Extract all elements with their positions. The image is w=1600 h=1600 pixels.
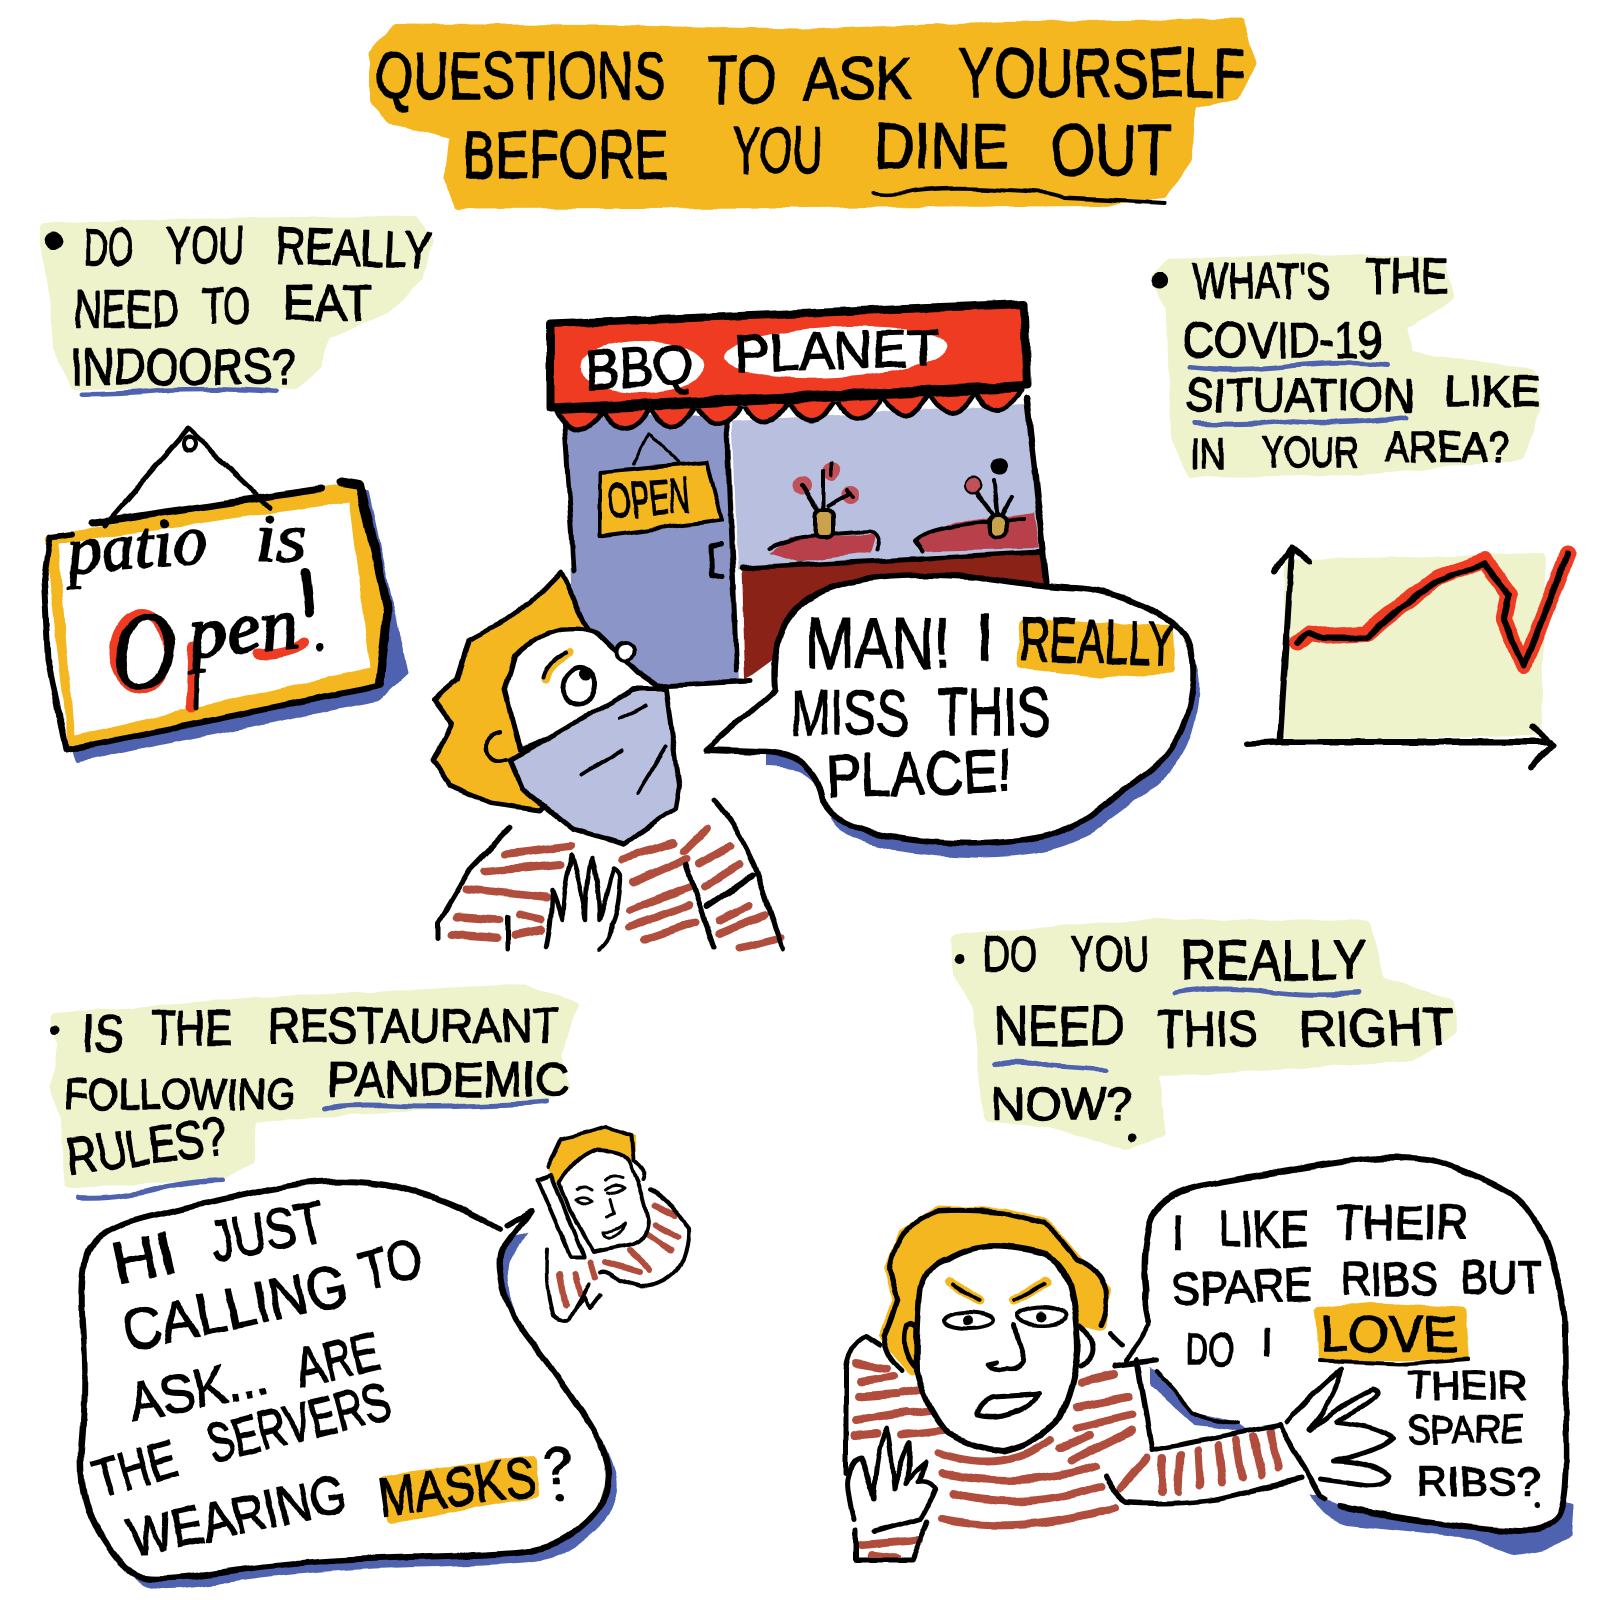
- speech bubble: man i really miss this place: MAN!: [806, 604, 950, 684]
- panel: do you really need to eat indoors: TO: [202, 278, 250, 336]
- icon: patio is open sign: [44, 429, 406, 760]
- speech bubble: calling about masks: ARE: [290, 1321, 386, 1399]
- ears: [905, 1324, 1093, 1368]
- panel: do you really need this right now: [954, 924, 1453, 1145]
- speech bubble: i like their spare ribs: RIBS?: [1417, 1458, 1540, 1505]
- speech bubble: calling about masks: HI: [106, 1219, 182, 1298]
- panel: do you really need to eat indoors: [44, 217, 433, 395]
- awning: [550, 304, 1027, 408]
- panel: do you really need this right now: REALLY: [1180, 928, 1366, 991]
- panel: do you really need to eat indoors: REALLY: [275, 217, 433, 280]
- panel: do you really need to eat indoors: EAT: [283, 275, 372, 331]
- title: DINE: [874, 110, 1009, 182]
- speech bubble: calling about masks: ASK...: [123, 1346, 272, 1434]
- speech bubble: i like their spare ribs: SPARE: [1407, 1408, 1524, 1452]
- speech bubble: calling about masks: [81, 1181, 616, 1589]
- face: [559, 1149, 648, 1252]
- shop name: PLANET: [733, 319, 940, 384]
- speech bubble: i like their spare ribs: RIBS: [1341, 1253, 1438, 1305]
- title: [374, 24, 1252, 204]
- hair: [884, 1211, 1106, 1370]
- panel: do you really need this right now: RIGHT: [1299, 998, 1453, 1059]
- pointing arm: [1106, 1325, 1302, 1503]
- striped body: [547, 1190, 689, 1320]
- title: OUT: [1050, 111, 1172, 191]
- panel: do you really need to eat indoors: NEED: [74, 281, 179, 339]
- speech bubble: calling about masks: SERVERS: [200, 1371, 395, 1475]
- line chart: rising covid curve: [1246, 548, 1568, 768]
- speech bubble: man i really miss this place: REALLY: [1019, 605, 1177, 679]
- title: ASK: [803, 45, 912, 112]
- speech bubble: i like their spare ribs: LOVE: [1320, 1306, 1458, 1362]
- left table with flowers: [770, 463, 878, 562]
- eyes, brows, nose and mouth: [944, 1282, 1066, 1417]
- speech bubble: i like their spare ribs: BUT: [1461, 1251, 1542, 1303]
- panel: what's the covid-19 situation like in your area: [1152, 248, 1540, 479]
- illustration: angry person with striped top: [846, 1210, 1392, 1560]
- panel: what's the covid-19 situation like in your area: WHAT'S: [1193, 253, 1331, 309]
- panel: is the restaurant following pandemic rules: FOLLOWING: [64, 1070, 296, 1119]
- panel: do you really need to eat indoors: DO: [84, 219, 133, 277]
- panel: is the restaurant following pandemic rules: IS: [82, 1005, 125, 1063]
- panel: is the restaurant following pandemic rules: RULES?: [63, 1107, 230, 1187]
- facial features: [576, 1177, 625, 1238]
- speech bubble: calling about masks: TO: [353, 1228, 429, 1302]
- panel: is the restaurant following pandemic rules: THE: [151, 1000, 232, 1058]
- speech bubble: i like their spare ribs: SPARE: [1171, 1258, 1313, 1315]
- restaurant door: [566, 415, 740, 686]
- open sign on door: [600, 434, 722, 536]
- speech bubble: calling about masks: MASKS: [374, 1445, 539, 1529]
- speech bubble: i like their spare ribs: THEIR: [1407, 1364, 1527, 1408]
- hair: [433, 571, 640, 810]
- panel: do you really need this right now: NOW?: [991, 1078, 1132, 1130]
- face: [917, 1246, 1078, 1451]
- speech bubble: man i really miss this place: I: [976, 600, 994, 674]
- speech bubble: calling about masks: THE: [87, 1429, 184, 1510]
- panel: do you really need to eat indoors: YOU: [166, 217, 245, 275]
- panel: is the restaurant following pandemic rules: PANDEMIC: [327, 1054, 569, 1107]
- speech bubble: man i really miss this place: [706, 576, 1199, 858]
- title: YOURSELF: [958, 34, 1246, 112]
- icon: patio is open sign: O: [112, 590, 176, 712]
- restaurant window: [732, 405, 1042, 570]
- speech bubble: i like their spare ribs: I: [1172, 1207, 1185, 1259]
- panel: do you really need this right now: DO: [984, 926, 1037, 982]
- illustration: masked person looking up: [433, 571, 783, 950]
- door handle: [711, 544, 723, 577]
- icon: patio is open sign: patio: [60, 501, 210, 589]
- panel: what's the covid-19 situation like in your area: IN: [1190, 430, 1226, 479]
- panel: is the restaurant following pandemic rules: [51, 990, 573, 1198]
- speech bubble: i like their spare ribs: DO: [1185, 1323, 1234, 1375]
- striped top: [439, 800, 783, 950]
- shop name: BBQ: [583, 332, 695, 402]
- speech bubble: calling about masks: CALLING: [117, 1253, 354, 1364]
- title: QUESTIONS: [375, 38, 666, 114]
- pointing hand: [1280, 1369, 1392, 1499]
- eye and brow: [544, 643, 634, 709]
- hand: [546, 855, 620, 950]
- panel: what's the covid-19 situation like in your area: YOUR: [1262, 428, 1359, 477]
- speech bubble: man i really miss this place: PLACE!: [825, 737, 1013, 812]
- illustration: person on the phone: [538, 1127, 689, 1320]
- speech bubble: calling about masks: ?: [543, 1438, 572, 1496]
- mask: [510, 689, 679, 844]
- hair: [548, 1127, 635, 1183]
- panel: do you really need this right now: NEED: [994, 994, 1124, 1057]
- speech bubble: i like their spare ribs: LIKE: [1218, 1201, 1308, 1257]
- counter: [742, 552, 1050, 680]
- panel: what's the covid-19 situation like in your area: AREA?: [1384, 423, 1509, 472]
- awning scallops: [556, 390, 1022, 431]
- icon: patio is open sign: pen: [179, 583, 302, 674]
- speech bubble: man i really miss this place: THIS: [938, 674, 1050, 750]
- phone: [538, 1175, 584, 1257]
- panel: what's the covid-19 situation like in your area: SITUATION: [1185, 369, 1415, 421]
- title: BEFORE: [462, 117, 668, 193]
- right table with flowers: [915, 458, 1040, 551]
- open sign on door: OPEN: [606, 467, 692, 530]
- speech bubble: i like their spare ribs: THEIR: [1336, 1197, 1468, 1250]
- face: [505, 629, 663, 750]
- panel: do you really need this right now: THIS: [1157, 1001, 1257, 1059]
- title: TO: [707, 42, 776, 118]
- panel: what's the covid-19 situation like in your area: LIKE: [1445, 367, 1540, 416]
- speech bubble: i like their spare ribs: I: [1262, 1321, 1273, 1365]
- speech bubble: man i really miss this place: MISS: [791, 677, 908, 749]
- panel: do you really need this right now: YOU: [1070, 926, 1149, 982]
- icon: bbq planet restaurant: [550, 304, 1050, 686]
- panel: what's the covid-19 situation like in your area: THE: [1366, 248, 1448, 304]
- shop name: [580, 319, 949, 402]
- speech bubble: i like their spare ribs: [1137, 1158, 1574, 1555]
- speech bubble: calling about masks: JUST: [204, 1189, 329, 1275]
- striped sweater: [846, 1336, 1278, 1558]
- panel: what's the covid-19 situation like in your area: COVID-19: [1183, 312, 1382, 368]
- panel: do you really need to eat indoors: INDOORS?: [71, 339, 296, 395]
- left ear: [487, 732, 506, 761]
- panel: is the restaurant following pandemic rules: RESTAURANT: [268, 1000, 559, 1053]
- speech bubble: calling about masks: WEARING: [123, 1464, 352, 1569]
- title: YOU: [732, 113, 823, 187]
- icon: patio is open sign: is: [255, 500, 306, 576]
- left hand: [848, 1428, 935, 1560]
